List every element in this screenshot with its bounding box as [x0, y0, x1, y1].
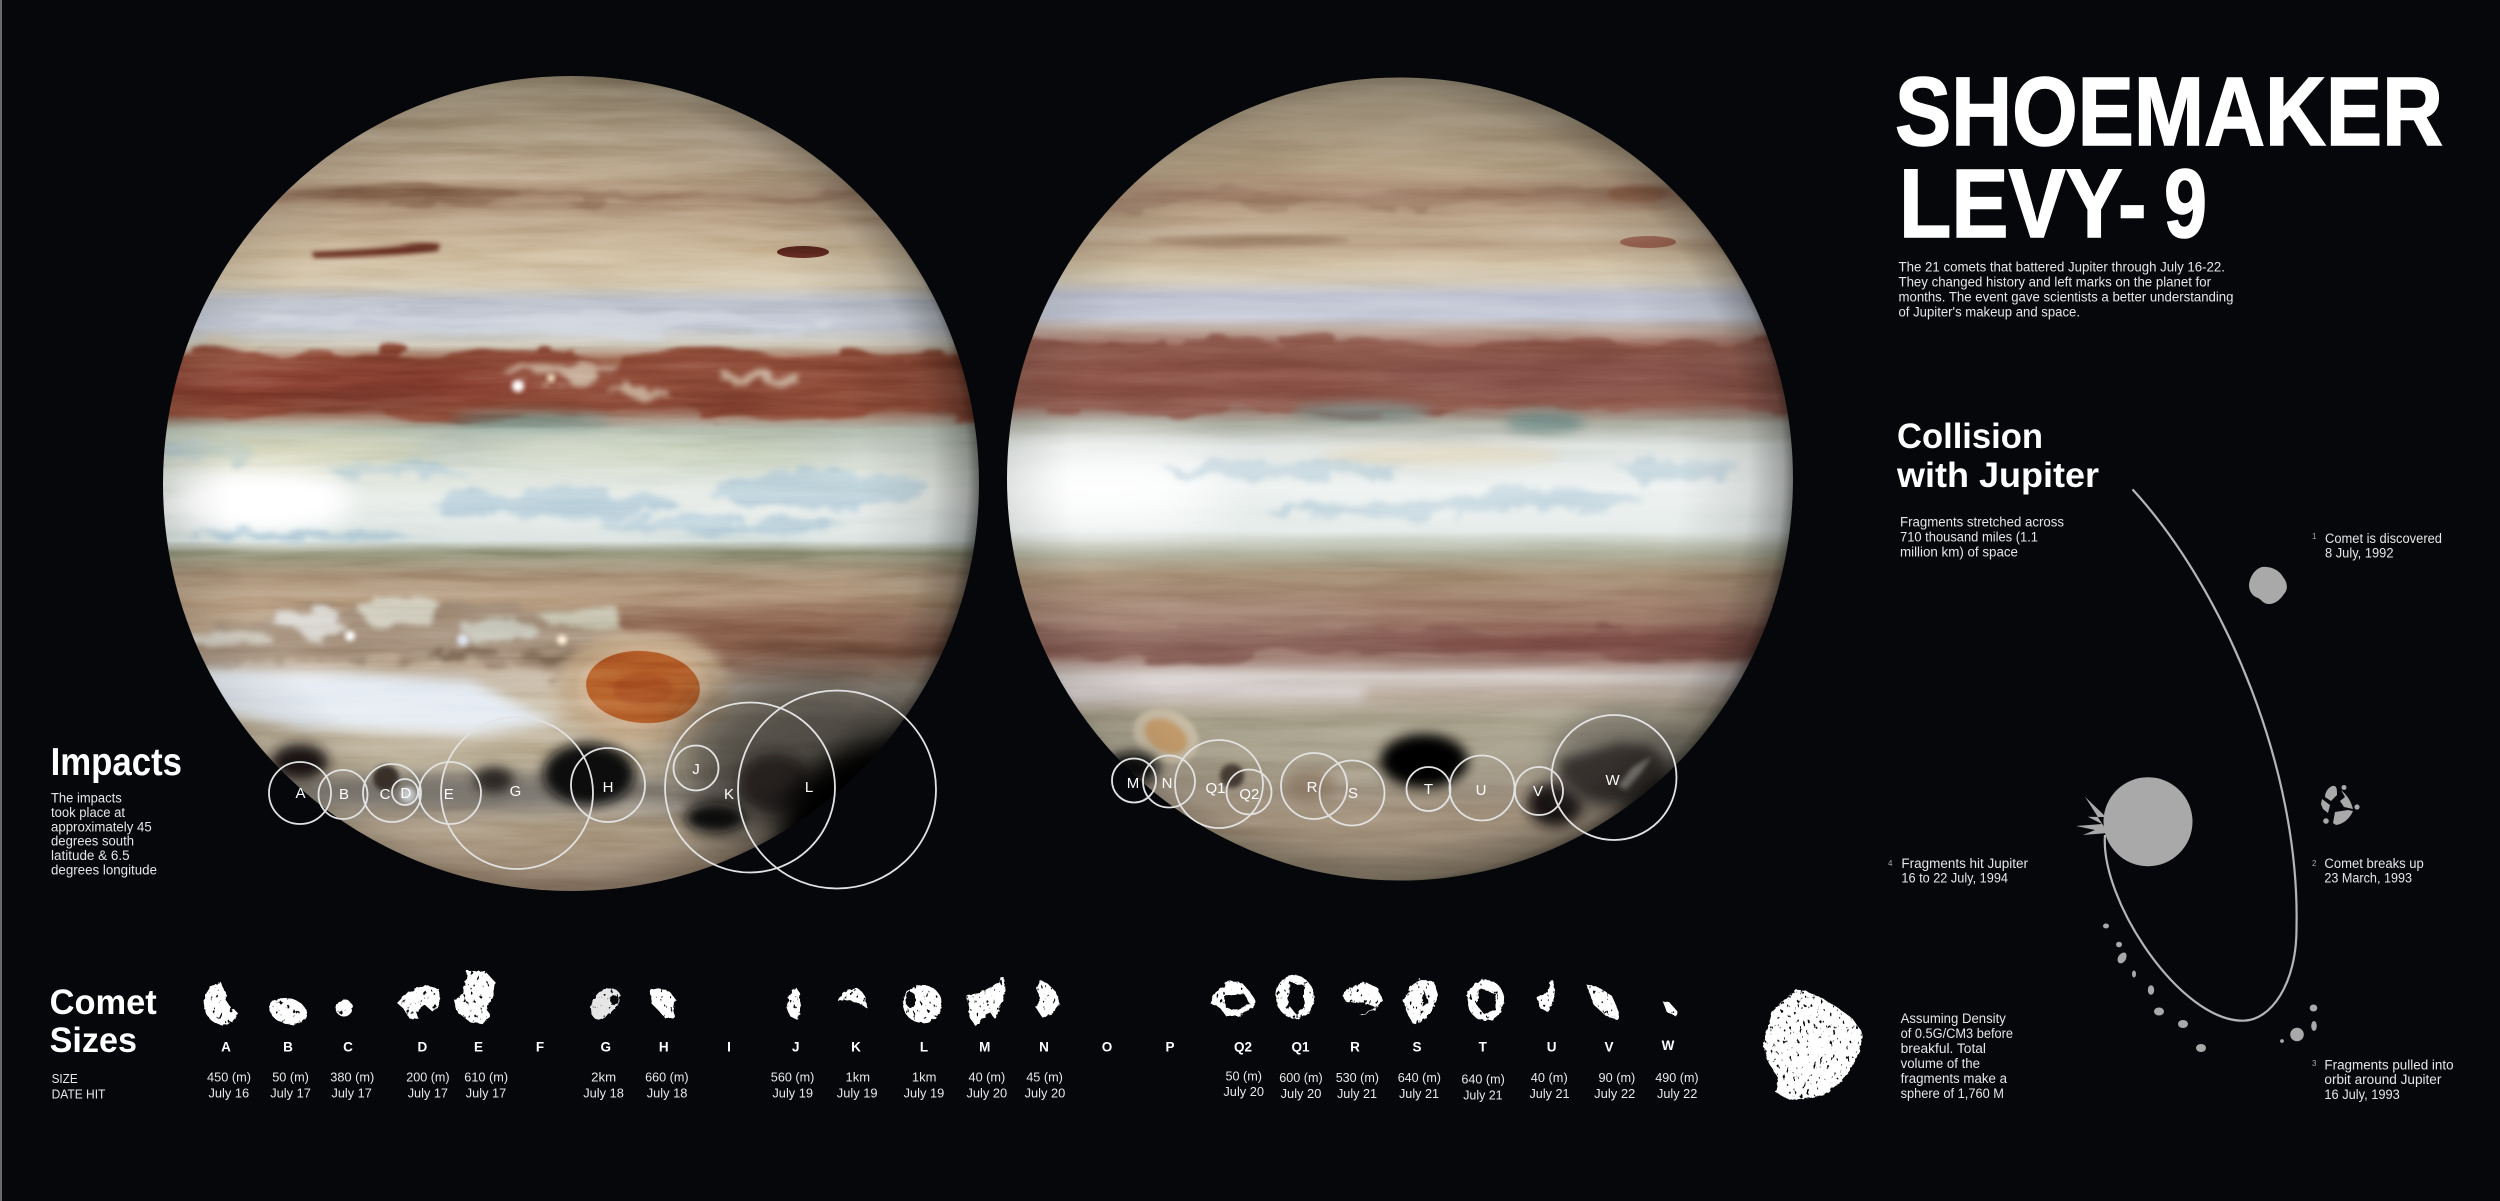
comet sizes: 610 (m)	[464, 1070, 508, 1085]
dark detail on comets	[226, 982, 1496, 1015]
impact circles A to L: A	[295, 785, 306, 802]
small Great Red Spot	[1142, 716, 1190, 756]
heading: collision with Jupiter: Collision	[1897, 417, 2043, 456]
comet letters: Q2	[1234, 1040, 1252, 1055]
intro text: months. The event gave scientists a better understanding	[1898, 290, 2234, 304]
comet letters: W	[1662, 1038, 1675, 1053]
comet impact dates: July 19	[904, 1086, 944, 1101]
timeline label 1: Comet is discovered	[2325, 531, 2442, 546]
impact circles A to L: E	[444, 786, 454, 803]
comet letters: J	[792, 1040, 799, 1055]
timeline label 3: Fragments pulled into	[2324, 1057, 2454, 1072]
impact circles M to W	[1112, 715, 1676, 840]
comet letters: H	[659, 1040, 669, 1055]
comet impact dates: July 18	[583, 1086, 624, 1101]
comet impact dates: July 18	[647, 1086, 687, 1101]
title: 9	[2164, 149, 2207, 258]
comet letters: A	[221, 1040, 231, 1055]
comet sizes: 640 (m)	[1461, 1071, 1505, 1086]
comet letters: P	[1165, 1040, 1175, 1055]
comet letters: M	[979, 1040, 990, 1055]
impact circles A to L: H	[603, 779, 613, 796]
row labels: SIZE	[52, 1071, 78, 1086]
impact circles M to W: S	[1348, 785, 1358, 802]
comet impact dates: July 20	[1223, 1084, 1264, 1099]
timeline label 3: orbit around Jupiter	[2324, 1072, 2442, 1087]
comet impact dates: July 19	[837, 1086, 878, 1101]
timeline label 3: 16 July, 1993	[2324, 1087, 2400, 1102]
note: fragments stretched	[1900, 514, 2064, 560]
comet impact dates: July 20	[1281, 1086, 1321, 1101]
orbit path	[2105, 489, 2297, 1021]
impacts text: The impacts	[51, 791, 122, 806]
comet sizes: 560 (m)	[771, 1070, 814, 1085]
comet impact dates: July 20	[1025, 1086, 1065, 1101]
comet silhouettes	[204, 971, 1862, 1100]
note: fragments stretched: Fragments stretched across	[1900, 514, 2064, 530]
comet sizes: 50 (m)	[1226, 1069, 1262, 1084]
comet impact dates: July 21	[1337, 1086, 1377, 1101]
fragments in orbit	[2103, 924, 2317, 1052]
comet letters: K	[851, 1040, 861, 1055]
timeline label 1	[2312, 531, 2442, 560]
comet letters: L	[920, 1040, 928, 1055]
impact circles A to L: L	[805, 779, 813, 796]
diagram: comet orbit	[2076, 489, 2360, 1052]
comet sizes	[207, 1069, 1699, 1086]
comet sizes: 40 (m)	[968, 1070, 1005, 1085]
icon: broken comet	[2321, 785, 2360, 825]
timeline label 3: 3	[2312, 1059, 2317, 1068]
timeline label 4: Fragments hit Jupiter	[1901, 856, 2028, 871]
timeline label 1: 8 July, 1992	[2325, 546, 2394, 560]
comet sizes: 1km	[846, 1070, 870, 1085]
note: fragments stretched: million km) of space	[1900, 544, 2018, 560]
comet sizes: 450 (m)	[207, 1070, 251, 1085]
comet impact dates: July 16	[208, 1086, 249, 1101]
timeline label 2: Comet breaks up	[2324, 856, 2424, 871]
comet impact dates	[208, 1084, 1697, 1102]
comet impact dates: July 17	[332, 1086, 372, 1101]
comet sizes: 380 (m)	[330, 1070, 374, 1085]
comet sizes: 40 (m)	[1531, 1070, 1568, 1085]
impacts text: latitude & 6.5	[51, 848, 130, 863]
impact circles M to W: V	[1533, 783, 1543, 800]
timeline label 2: 2	[2312, 859, 2317, 868]
comet sizes: 530 (m)	[1336, 1070, 1379, 1085]
comet letters: S	[1412, 1040, 1422, 1055]
comet impact dates: July 22	[1657, 1086, 1697, 1101]
comet letters: V	[1604, 1040, 1614, 1055]
comet letters: N	[1039, 1040, 1049, 1055]
comet letters	[221, 1038, 1675, 1055]
intro text: They changed history and left marks on the planet for	[1898, 274, 2211, 290]
comet letters: D	[418, 1040, 428, 1055]
heading: collision with Jupiter: with Jupiter	[1896, 456, 2099, 495]
comet letters: U	[1547, 1040, 1556, 1055]
comet sizes: 660 (m)	[645, 1070, 689, 1085]
comet sizes: 45 (m)	[1026, 1070, 1063, 1085]
impacts text: degrees south	[51, 834, 134, 849]
comet sizes: 640 (m)	[1398, 1070, 1441, 1085]
comet impact dates: July 22	[1594, 1086, 1635, 1101]
note: density and total volume: volume of the	[1901, 1056, 1980, 1071]
heading: comet sizes: Comet	[50, 983, 157, 1022]
comet sizes: 490 (m)	[1655, 1070, 1699, 1085]
note: density and total volume: Assuming Density	[1901, 1011, 2006, 1026]
comet sizes: 50 (m)	[272, 1070, 309, 1085]
intro text: The 21 comets that battered Jupiter through July 16-22.	[1898, 260, 2225, 274]
note: density and total volume: fragments make a	[1901, 1071, 2007, 1086]
planet: Jupiter view two	[982, 70, 1810, 915]
heading: comet sizes: Sizes	[50, 1021, 137, 1060]
comet sizes: 600 (m)	[1279, 1070, 1323, 1085]
Jupiter with impact spikes	[2076, 777, 2192, 866]
row labels	[52, 1071, 105, 1102]
comet letters: T	[1479, 1040, 1488, 1055]
icon: whole comet	[2249, 567, 2287, 604]
impact circles M to W: T	[1424, 781, 1433, 798]
comet impact dates: July 21	[1463, 1088, 1503, 1102]
impact circles A to L: G	[510, 783, 521, 800]
impact circles M to W: M	[1127, 775, 1139, 792]
impact circles M to W: W	[1606, 772, 1621, 789]
comet letters: B	[283, 1040, 293, 1055]
comet impact dates: July 19	[772, 1086, 813, 1101]
impact circles A to L: K	[724, 786, 734, 803]
timeline label 2: 23 March, 1993	[2324, 870, 2412, 886]
impact circles A to L: J	[692, 761, 700, 778]
note: density and total volume: of 0.5G/CM3 before	[1901, 1026, 2013, 1041]
comet impact dates: July 17	[270, 1086, 311, 1101]
comet letters: I	[727, 1040, 731, 1055]
comet letters: C	[343, 1040, 353, 1055]
comet sizes: 200 (m)	[406, 1070, 450, 1085]
timeline label 4	[1888, 856, 2028, 886]
impacts text	[51, 791, 157, 877]
timeline label 2	[2312, 856, 2424, 886]
timeline label 4: 16 to 22 July, 1994	[1901, 870, 2008, 886]
panel: left Jupiter with impacts A to L	[163, 76, 979, 891]
impact circles A to L: B	[339, 786, 349, 803]
row labels: DATE HIT	[52, 1087, 105, 1102]
impact circles M to W: N	[1162, 775, 1172, 792]
note: fragments stretched: 710 thousand miles (1.1	[1900, 530, 2038, 544]
impact circles A to L	[269, 690, 936, 888]
comet impact dates: July 20	[966, 1086, 1007, 1101]
timeline label 3	[2312, 1057, 2454, 1102]
impact circles A to L: D	[400, 785, 411, 802]
comet sizes: 1km	[912, 1070, 936, 1085]
comet letters: R	[1350, 1040, 1360, 1055]
impacts text: approximately 45	[51, 819, 152, 834]
intro text: of Jupiter's makeup and space.	[1898, 304, 2080, 320]
impact circles M to W: U	[1476, 782, 1486, 799]
comet letters: E	[474, 1040, 483, 1055]
Great Red Spot	[586, 650, 700, 724]
comet letters: F	[536, 1040, 544, 1055]
comet sizes: 2km	[591, 1070, 616, 1085]
comet impact dates: July 21	[1530, 1086, 1570, 1101]
title: LEVY-	[1899, 149, 2146, 258]
intro text	[1898, 260, 2234, 320]
heading: collision with Jupiter	[1896, 417, 2099, 495]
comet letters: O	[1102, 1040, 1112, 1055]
impact circles M to W: Q1	[1205, 780, 1226, 797]
impact circles M to W: Q2	[1239, 786, 1259, 803]
title	[1895, 57, 2443, 258]
timeline label 4: 4	[1888, 859, 1893, 868]
impact circles A to L: C	[380, 786, 391, 803]
heading: impacts: Impacts	[51, 741, 182, 784]
heading: comet sizes	[50, 983, 157, 1060]
panel: right Jupiter with impacts M to W	[982, 70, 1810, 915]
impacts text: took place at	[51, 805, 125, 820]
comet sizes: 90 (m)	[1598, 1070, 1635, 1085]
note: density and total volume: sphere of 1,760 M	[1901, 1086, 2004, 1101]
comet impact dates: July 17	[466, 1086, 506, 1101]
timeline label 1: 1	[2312, 532, 2317, 541]
comet letters: G	[601, 1040, 611, 1055]
note: density and total volume	[1901, 1011, 2013, 1101]
note: density and total volume: breakful. Total	[1901, 1041, 1986, 1056]
comet impact dates: July 17	[408, 1086, 448, 1101]
comet impact dates: July 21	[1399, 1086, 1439, 1101]
impact circles M to W: R	[1307, 779, 1318, 796]
comet letters: Q1	[1291, 1040, 1310, 1055]
large combined comet	[1763, 990, 1862, 1100]
planet: Jupiter view one	[163, 76, 979, 891]
impacts text: degrees longitude	[51, 862, 157, 877]
